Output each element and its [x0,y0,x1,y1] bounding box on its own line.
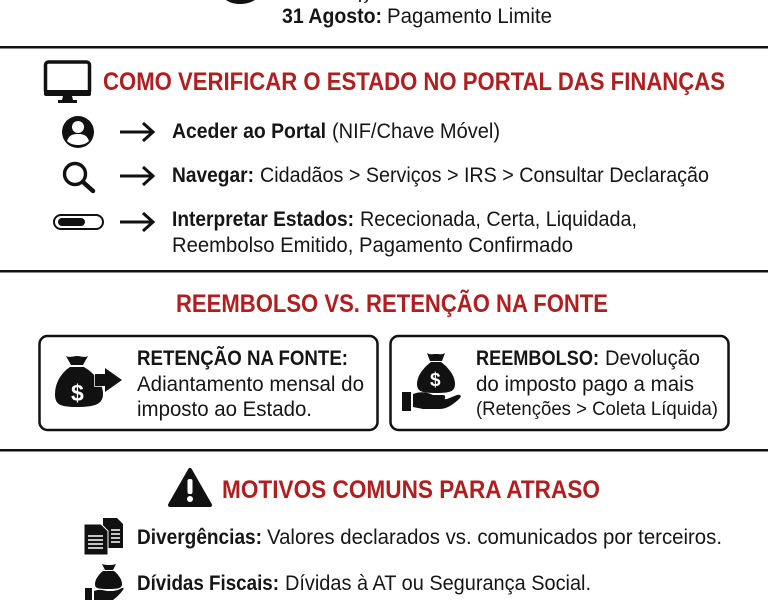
icon: documents [84,518,123,555]
text: tax debts: Dívidas Fiscais: [137,572,279,595]
text: payment deadline: 31 Agosto: [282,5,382,28]
icon: bag in hand small [85,564,124,600]
text: interpret states: Reembolso Emitido, Pagamento Confirmado [172,234,573,257]
text: access portal: (NIF/Chave Móvel) [332,120,500,143]
text: discrepancies: Divergências: [137,526,262,549]
icon: magnifier [64,164,93,191]
text: interpret states: Interpretar Estados: [172,208,354,231]
text: withholding definition: Adiantamento mensal do [137,373,364,396]
icon: money bag in hand: $ [430,370,441,391]
icon: progress bar [54,215,103,229]
text: interpret states [172,208,637,257]
section: top dates (clipped) [226,0,552,28]
text: navigate: Navegar: [172,164,254,187]
arrow: step 3 [120,213,153,231]
text: tax debts [137,572,591,595]
panel: refund vs withholding [40,288,728,430]
text: navigate: Cidadãos > Serviços > IRS > Consultar Declaração [260,164,709,187]
heading: common delay reasons: MOTIVOS COMUNS PARA ATRASO [222,476,600,504]
text: refund definition: Devolução [605,347,700,370]
text: tax debts: Dívidas à AT ou Segurança Social. [285,572,591,595]
text: refund definition: REEMBOLSO: [476,347,599,370]
text: withholding definition: imposto ao Estado. [137,398,312,421]
icon: user [62,116,94,148]
text: withholding definition: RETENÇÃO NA FONTE: [137,347,348,370]
text: refund definition: (Retenções > Coleta Líquida) [476,399,718,420]
arrow: step 1 [120,123,153,141]
icon: money bag with arrow [55,356,122,407]
text: payment deadline: Pagamento Limite [387,5,552,28]
card: withholding [40,336,378,430]
panel: common delay reasons [84,470,722,600]
text: discrepancies: Valores declarados vs. comunicados por terceiros. [267,526,722,549]
text: payment deadline [282,5,552,28]
icon: money bag in hand [402,353,461,411]
heading: refund vs withholding: REEMBOLSO VS. RETENÇÃO NA FONTE [176,288,608,318]
icon: monitor [44,62,91,103]
icon: money bag with arrow: $ [71,380,84,406]
text: withholding definition [137,347,364,421]
text: refund definition [476,347,718,420]
arrow: step 2 [120,167,153,185]
card: refund [390,336,728,430]
panel: portal check [44,62,725,257]
text: interpret states: Rececionada, Certa, Liquidada, [360,208,637,231]
icon: warning triangle [170,470,210,505]
text: access portal [172,120,500,143]
text: refund definition: do imposto pago a mais [476,373,694,396]
text: access portal: Aceder ao Portal [172,120,326,143]
